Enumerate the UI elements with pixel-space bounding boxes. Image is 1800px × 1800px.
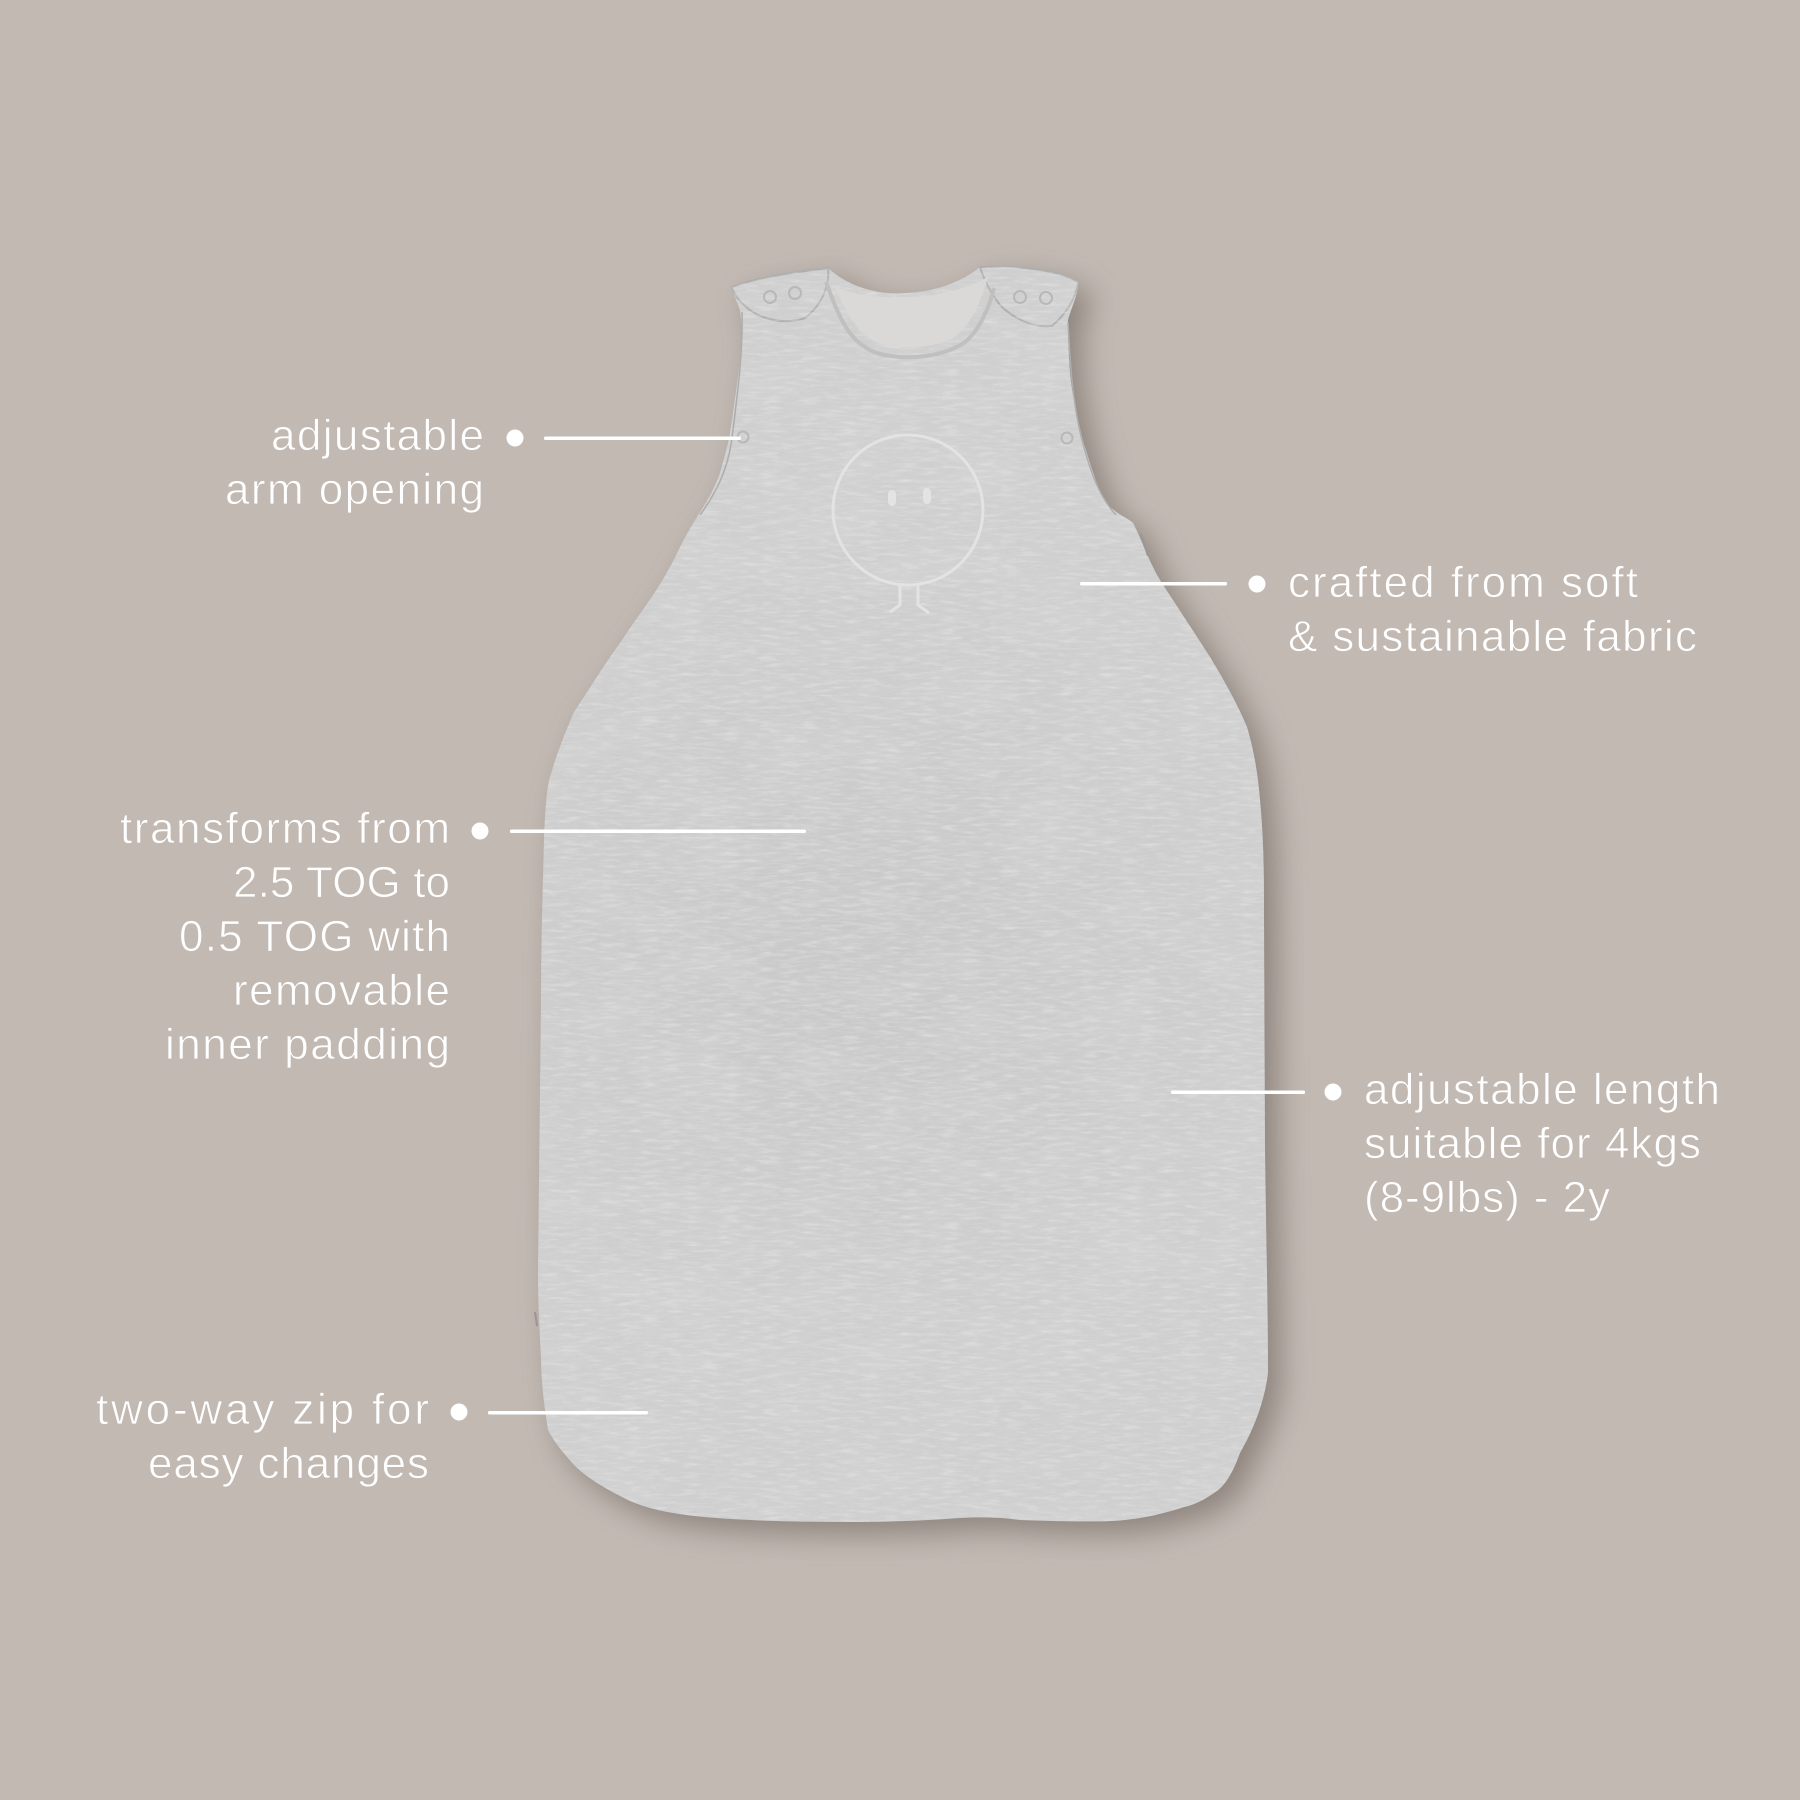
callout text: arm opening xyxy=(225,465,484,514)
right shoulder flap xyxy=(980,267,1078,326)
callout text xyxy=(120,804,450,1069)
shoulder snaps xyxy=(738,287,1072,444)
callout text: adjustable length xyxy=(1364,1065,1720,1114)
callout: adjustable arm opening xyxy=(225,411,741,514)
garment body xyxy=(538,267,1268,1522)
callout text: easy changes xyxy=(148,1439,429,1488)
callout: two-way zip xyxy=(96,1385,648,1488)
left shoulder flap xyxy=(732,268,828,321)
callout dot xyxy=(506,430,524,446)
callout text: suitable for 4kgs xyxy=(1364,1119,1701,1168)
callout text: transforms from xyxy=(120,804,450,853)
callout dot xyxy=(1248,576,1266,592)
callout dot xyxy=(450,1404,468,1420)
right arm seam xyxy=(1068,322,1116,515)
callout text: adjustable xyxy=(271,411,484,460)
callout dot xyxy=(472,822,488,840)
callout text: inner padding xyxy=(165,1020,450,1069)
left arm seam xyxy=(700,312,742,515)
callout: transforms from 2.5 TOG to 0.5 TOG xyxy=(120,804,806,1069)
sleeping bag garment xyxy=(530,260,1281,1534)
neck binding xyxy=(826,282,994,357)
callout text: 0.5 TOG with xyxy=(179,912,450,961)
callout text xyxy=(1364,1065,1720,1222)
callout text: crafted from soft xyxy=(1288,558,1638,607)
callout text: & sustainable fabric xyxy=(1288,612,1697,661)
neck inner lining xyxy=(835,277,988,347)
callout leader line xyxy=(544,436,741,440)
embroidered bird logo xyxy=(833,435,983,613)
callout text xyxy=(1288,558,1697,661)
callout leader line xyxy=(510,830,806,833)
garment drop shadow xyxy=(551,279,1281,1534)
callout text: (8-9lbs) - 2y xyxy=(1364,1173,1610,1222)
callout: crafted from soft & sustainable fabric xyxy=(1080,558,1697,661)
callout text: 2.5 TOG to xyxy=(233,858,450,907)
callout leader line xyxy=(1171,1090,1305,1094)
callout text: removable xyxy=(233,966,450,1015)
callout text: two-way zip for xyxy=(96,1385,429,1434)
zip pulls xyxy=(535,534,1148,1326)
callout text xyxy=(96,1385,429,1488)
callout: adjustable length xyxy=(1171,1065,1720,1222)
callout text xyxy=(225,411,484,514)
callout dot xyxy=(1324,1084,1342,1100)
callout leader line xyxy=(488,1411,648,1414)
callout leader line xyxy=(1080,582,1227,586)
fabric texture xyxy=(530,260,1275,1530)
